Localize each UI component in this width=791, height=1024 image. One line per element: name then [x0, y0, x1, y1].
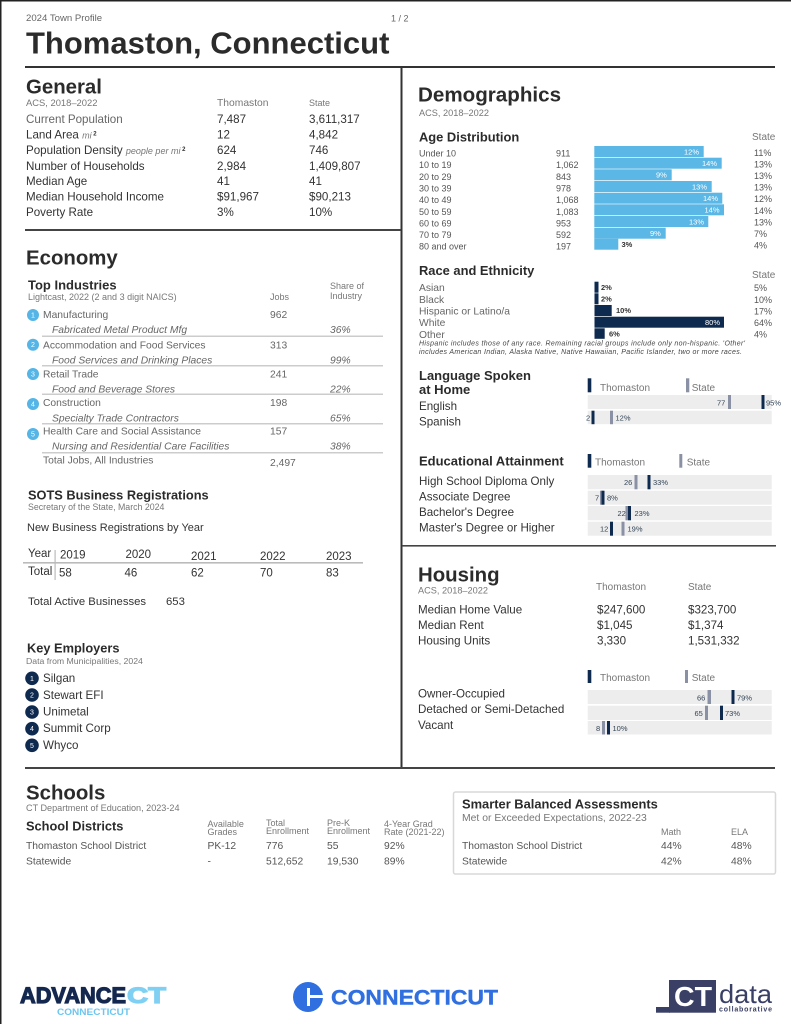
source: sots: Secretary of the State, March 2024 — [28, 502, 165, 512]
registrations table: 62 — [191, 568, 204, 580]
range chart: housing: 8 — [596, 724, 600, 733]
general table: 2 — [92, 132, 97, 138]
key employers list: Whyco — [43, 739, 78, 752]
logo: ct data collaborative: data — [719, 979, 773, 1009]
assessments table: Statewide — [462, 856, 507, 868]
industries table: Accommodation and Food Services — [43, 340, 206, 351]
bar chart: race and ethnicity: 10% — [754, 295, 772, 305]
housing table: Median Home Value — [418, 604, 522, 616]
industries table: 22% — [329, 384, 351, 396]
general table: 624 — [217, 144, 237, 157]
general table: 12 — [217, 128, 230, 142]
bar chart: age distribution: 843 — [556, 172, 571, 182]
general table: 2 — [180, 147, 186, 153]
bar chart: age distribution: 1,062 — [556, 160, 579, 170]
range chart: education: 26 — [624, 478, 632, 487]
general table: 10% — [309, 206, 332, 219]
industries column headers: Industry — [330, 291, 363, 301]
panel: demographics — [418, 84, 781, 536]
key employers list: Silgan — [43, 672, 75, 685]
key employers list: 3 — [30, 710, 34, 716]
label: state: State — [752, 132, 776, 143]
logo: advance ct — [20, 983, 167, 1017]
bar chart: age distribution: 911 — [556, 148, 570, 158]
key employers list: Stewart EFI — [43, 689, 104, 702]
assessments table: 42% — [661, 856, 682, 868]
school districts table: Grades — [208, 827, 238, 837]
footnote: race and ethnicity — [419, 341, 746, 356]
bar chart: age distribution: 1,068 — [556, 195, 579, 205]
bar chart: age distribution: 13% — [754, 160, 772, 170]
bar chart: race and ethnicity: Hispanic or Latino/a — [419, 306, 510, 318]
bar chart: race and ethnicity: 6% — [609, 330, 620, 338]
assessments table: ELA — [731, 827, 748, 837]
legend: education: State — [687, 458, 710, 468]
legend: housing: Thomaston — [600, 673, 650, 684]
bar chart: age distribution: 592 — [556, 230, 571, 240]
general table: $90,213 — [309, 190, 351, 204]
general table: Number of Households — [26, 160, 145, 173]
column headers: housing: State — [688, 582, 712, 593]
school districts table: Pre-K — [327, 818, 350, 828]
range chart: education: 19% — [628, 524, 643, 534]
bar chart: age distribution: 20 to 29 — [419, 172, 452, 182]
bar chart: age distribution: 14% — [704, 206, 720, 215]
key employers list — [25, 672, 111, 752]
page number: 1 / 2 — [391, 14, 409, 24]
industries table: 1 — [31, 312, 35, 320]
logo: ct data collaborative: CT — [674, 981, 712, 1012]
housing table: $323,700 — [688, 604, 736, 616]
industries table: 99% — [330, 356, 351, 366]
industries table: 3 — [31, 372, 35, 378]
assessments table: Math — [661, 827, 681, 837]
general table: Median Household Income — [26, 190, 164, 204]
source: assessments: Met or Exceeded Expectations, 2022-23 — [462, 813, 647, 824]
range chart: language: Spanish — [419, 416, 461, 429]
range chart: education: 8% — [607, 494, 618, 502]
range chart: housing: 65 — [694, 709, 703, 718]
industries table: 65% — [330, 413, 351, 424]
registrations table: 83 — [326, 568, 339, 580]
subheading: sots business registrations: SOTS Business Registrations — [28, 488, 209, 503]
industries table: Specialty Trade Contractors — [52, 413, 179, 424]
industries table: Retail Trade — [43, 369, 99, 380]
registrations table — [23, 548, 363, 580]
range chart: language: English — [419, 400, 457, 413]
bar chart: age distribution: 9% — [650, 229, 661, 238]
general table: 3% — [217, 206, 234, 219]
range chart: housing: Detached or Semi-Detached — [418, 703, 564, 716]
bar chart: age distribution: 1,083 — [556, 207, 579, 217]
registrations table: 2021 — [191, 551, 217, 563]
industries column headers — [270, 281, 365, 302]
general table: Poverty Rate — [26, 206, 93, 219]
registrations table: 2020 — [126, 549, 151, 561]
bar chart: race and ethnicity: 64% — [754, 318, 772, 328]
panel: economy — [23, 248, 383, 752]
industries table: Nursing and Residential Care Facilities — [52, 442, 229, 453]
bar chart: age distribution: 80 and over — [419, 242, 467, 252]
logo: ct data collaborative — [656, 979, 773, 1014]
range chart: language: 2 — [586, 414, 590, 422]
column headers: housing — [596, 582, 712, 593]
bar chart: age distribution: 30 to 39 — [419, 184, 452, 194]
bar chart: age distribution: 978 — [556, 184, 571, 194]
school districts table: 776 — [266, 841, 283, 852]
subheading: race and ethnicity: Race and Ethnicity — [419, 263, 535, 278]
range chart: housing: Vacant — [418, 719, 454, 732]
bar chart: age distribution: 3% — [622, 240, 633, 249]
range chart: education: Bachelor's Degree — [419, 506, 514, 519]
bar chart: age distribution: Under 10 — [419, 148, 456, 158]
industries table: 241 — [270, 369, 287, 380]
source: schools: CT Department of Education, 2023-24 — [26, 803, 180, 813]
source: key employers: Data from Municipalities, 2024 — [26, 656, 143, 666]
general table — [26, 113, 361, 219]
industries table: Food Services and Drinking Places — [52, 356, 212, 366]
key employers list: 5 — [30, 743, 34, 750]
range chart: language: 77 — [717, 398, 725, 408]
bar chart: race and ethnicity: White — [419, 318, 446, 329]
industries table: 313 — [270, 340, 287, 351]
assessments table: 48% — [731, 856, 752, 868]
industries table: Health Care and Social Assistance — [43, 426, 201, 437]
bar chart: age distribution: 14% — [703, 194, 718, 203]
subheading: top industries: Top Industries — [28, 278, 117, 292]
bar chart: age distribution: 11% — [754, 148, 771, 158]
subheading: key employers: Key Employers — [27, 640, 119, 655]
general table: 41 — [309, 175, 322, 188]
bar chart: age distribution: 12% — [684, 148, 699, 156]
range chart: education — [419, 475, 772, 536]
column headers: State — [309, 98, 330, 108]
bar chart: race and ethnicity: 10% — [616, 306, 631, 315]
registrations table: 58 — [59, 568, 72, 580]
school districts table: 92% — [384, 841, 405, 852]
school districts table: Total — [266, 818, 285, 828]
assessments table: 48% — [731, 841, 752, 852]
bar chart: race and ethnicity: 5% — [754, 283, 767, 293]
bar chart: race and ethnicity: Black — [419, 295, 445, 306]
logo: advance ct: CT — [127, 983, 167, 1008]
total active businesses: 653 — [166, 596, 185, 608]
industries table: 962 — [270, 310, 287, 321]
bar chart: race and ethnicity: 2% — [601, 283, 612, 292]
bar chart: age distribution: 4% — [754, 240, 767, 250]
bar chart: age distribution: 13% — [689, 218, 704, 226]
industries table: Food and Beverage Stores — [52, 384, 175, 396]
industries table: 4 — [31, 402, 35, 408]
bar chart: age distribution: 50 to 59 — [419, 207, 452, 217]
bar chart: age distribution: 70 to 79 — [419, 230, 452, 240]
panel: schools — [26, 782, 776, 874]
bar chart: age distribution: 13% — [754, 171, 772, 181]
legend: language: Thomaston — [600, 383, 650, 394]
registrations table: Total — [28, 566, 52, 578]
column headers — [217, 98, 330, 109]
general table: 746 — [309, 144, 328, 157]
bar chart: age distribution: 13% — [692, 182, 707, 192]
general table: 7,487 — [217, 113, 246, 126]
general table: Median Age — [26, 175, 87, 188]
school districts table: - — [208, 856, 211, 868]
legend: housing: State — [692, 673, 715, 684]
housing table: $1,045 — [597, 619, 632, 632]
bar chart: age distribution: 10 to 19 — [419, 160, 452, 170]
assessments table: 44% — [661, 841, 682, 852]
subheading: language spoken at home: Language Spoken — [419, 368, 531, 383]
range chart: education: 22 — [618, 509, 626, 518]
bar chart: race and ethnicity: Asian — [419, 283, 445, 294]
general table: 41 — [217, 175, 230, 188]
range chart: education: 7 — [595, 494, 599, 502]
bar chart: race and ethnicity: 17% — [754, 306, 772, 316]
bar chart: age distribution: 197 — [556, 242, 571, 252]
subheading: age distribution: Age Distribution — [419, 130, 519, 145]
logo: connecticut: CONNECTICUT — [331, 986, 498, 1010]
range chart: education: 12 — [600, 524, 608, 534]
key employers list: 2 — [30, 692, 34, 700]
general table: Land Area mi — [26, 128, 92, 142]
general table: 1,409,807 — [309, 160, 361, 173]
range chart: housing: 10% — [612, 724, 628, 733]
registrations table: 70 — [260, 568, 273, 580]
range chart: education: 33% — [653, 478, 668, 487]
bar chart: age distribution: 14% — [702, 159, 717, 168]
industries table: 5 — [31, 432, 35, 438]
column headers: Thomaston — [217, 98, 269, 109]
legend: housing — [588, 670, 715, 684]
key employers list: 4 — [30, 726, 34, 733]
heading: general: General — [26, 76, 102, 98]
range chart: education: High School Diploma Only — [419, 475, 555, 488]
bar chart: age distribution: 953 — [556, 218, 571, 228]
registrations table: 46 — [124, 568, 137, 580]
school districts table: PK-12 — [208, 841, 236, 852]
registrations table: Year — [28, 548, 51, 560]
logo: advance ct: ADVANCE — [20, 983, 126, 1008]
school districts table: 4-Year Grad — [384, 819, 433, 829]
range chart: language: 12% — [616, 414, 631, 422]
industries table: 198 — [270, 398, 287, 409]
legend: education — [588, 454, 710, 468]
panel: smarter balanced assessments — [454, 792, 776, 874]
industries table: 38% — [330, 442, 351, 453]
bar chart: age distribution: 13% — [754, 182, 772, 192]
panel: general — [26, 76, 361, 219]
heading: smarter balanced assessments: Smarter Balanced Assessments — [462, 796, 658, 812]
source: housing: ACS, 2018–2022 — [418, 586, 488, 596]
legend: language — [588, 378, 715, 394]
label: state: State — [752, 270, 776, 281]
industries table — [27, 309, 383, 469]
range chart: education: Master's Degree or Higher — [419, 522, 555, 534]
source: demographics: ACS, 2018–2022 — [419, 108, 489, 118]
industries table: Fabricated Metal Product Mfg — [52, 325, 187, 336]
subheading: educational attainment: Educational Attainment — [419, 454, 564, 469]
industries table: 2,497 — [270, 458, 296, 469]
logo: advance ct: CONNECTICUT — [57, 1007, 131, 1017]
assessments table: Thomaston School District — [462, 841, 582, 852]
range chart: education: 23% — [634, 509, 650, 518]
range chart: housing: 73% — [725, 709, 740, 718]
industries table: 36% — [330, 325, 351, 336]
industries table: Manufacturing — [43, 310, 109, 321]
range chart: housing: Owner-Occupied — [418, 688, 505, 701]
logo: connecticut — [293, 982, 498, 1012]
assessments table — [462, 827, 752, 868]
bar chart: age distribution: 13% — [754, 218, 772, 228]
bar chart: age distribution: 14% — [754, 206, 772, 216]
key employers list: Unimetal — [43, 706, 89, 718]
range chart: housing: 66 — [697, 694, 705, 702]
footnote: race and ethnicity: includes American Indian, Alaska Native, Native Hawaiian, Pacific Islander, two or more races. — [419, 349, 742, 356]
report label: 2024 Town Profile — [26, 13, 102, 24]
housing table — [418, 604, 740, 648]
school districts table: Statewide — [26, 856, 71, 868]
school districts table: Enrollment — [327, 826, 371, 836]
school districts table: Rate (2021-22) — [384, 827, 445, 837]
bar chart: age distribution: 9% — [656, 170, 667, 180]
general table: 3,611,317 — [309, 113, 360, 126]
subheading: language spoken at home — [419, 368, 531, 397]
bar chart: age distribution: 60 to 69 — [419, 218, 452, 228]
industries table: Total Jobs, All Industries — [43, 456, 153, 467]
key employers list: 1 — [30, 676, 34, 683]
school districts table: Available — [208, 819, 244, 829]
school districts table: 55 — [327, 841, 339, 852]
housing table: $1,374 — [688, 619, 724, 632]
housing table: Housing Units — [418, 634, 490, 648]
school districts table: 19,530 — [327, 856, 359, 868]
bar chart: age distribution: 7% — [754, 229, 767, 239]
bar chart: age distribution: 40 to 49 — [419, 195, 452, 205]
range chart: housing: 79% — [737, 694, 752, 702]
source: top industries: Lightcast, 2022 (2 and 3 digit NAICS) — [28, 292, 177, 302]
registrations table: 2022 — [260, 551, 286, 563]
total active businesses: Total Active Businesses — [28, 596, 146, 608]
industries column headers: Jobs — [270, 292, 290, 302]
housing table: $247,600 — [597, 604, 645, 616]
bar chart: age distribution: 12% — [754, 194, 772, 204]
school districts table: Thomaston School District — [26, 841, 146, 852]
school districts table: 89% — [384, 856, 405, 868]
logo: ct data collaborative: collaborative — [719, 1006, 772, 1014]
bar chart: race and ethnicity: 4% — [754, 330, 767, 340]
heading: schools: Schools — [26, 782, 105, 804]
industries table: 2 — [31, 342, 35, 349]
general table: 2,984 — [217, 160, 247, 173]
footnote: race and ethnicity: Hispanic includes those of any race. Remaining racial groups include only non-hispanic. 'Other' — [419, 341, 746, 348]
key employers list: Summit Corp — [43, 722, 111, 735]
bar chart: race and ethnicity — [419, 282, 772, 341]
heading: economy: Economy — [26, 248, 118, 270]
legend: education: Thomaston — [595, 458, 645, 468]
industries table: Construction — [43, 398, 101, 409]
range chart: language — [419, 395, 781, 429]
title: Thomaston, Connecticut — [26, 26, 389, 60]
industries table: 157 — [270, 426, 287, 437]
range chart: housing — [418, 688, 772, 734]
registrations table: 2019 — [60, 550, 86, 562]
bar chart: race and ethnicity: 80% — [705, 318, 720, 327]
range chart: education: Associate Degree — [419, 491, 511, 504]
general table: Current Population — [26, 113, 123, 126]
school districts table: 512,652 — [266, 856, 303, 868]
heading: demographics: Demographics — [418, 84, 561, 107]
housing table: 1,531,332 — [688, 634, 740, 648]
subheading: language spoken at home: at Home — [419, 382, 470, 397]
range chart: language: 95% — [766, 398, 781, 408]
bar chart: race and ethnicity: 2% — [601, 294, 612, 304]
bar chart: race and ethnicity: Other — [419, 330, 445, 341]
legend: language: State — [692, 383, 715, 394]
subheading: school districts: School Districts — [26, 818, 123, 834]
industries column headers: Share of — [330, 281, 365, 291]
school districts table — [26, 818, 445, 868]
school districts table: Enrollment — [266, 826, 310, 836]
registrations table: 2023 — [326, 551, 352, 563]
general table: $91,967 — [217, 190, 259, 204]
housing table: 3,330 — [597, 634, 626, 648]
column headers: housing: Thomaston — [596, 582, 646, 593]
general table: Population Density people per mi — [26, 144, 180, 157]
label: new registrations by year: New Business Registrations by Year — [27, 522, 204, 534]
heading: housing: Housing — [418, 565, 500, 587]
panel: housing — [418, 565, 772, 734]
general table: 4,842 — [309, 128, 338, 142]
source: general: ACS, 2018–2022 — [26, 97, 97, 108]
bar chart: age distribution — [419, 146, 772, 252]
housing table: Median Rent — [418, 619, 485, 632]
